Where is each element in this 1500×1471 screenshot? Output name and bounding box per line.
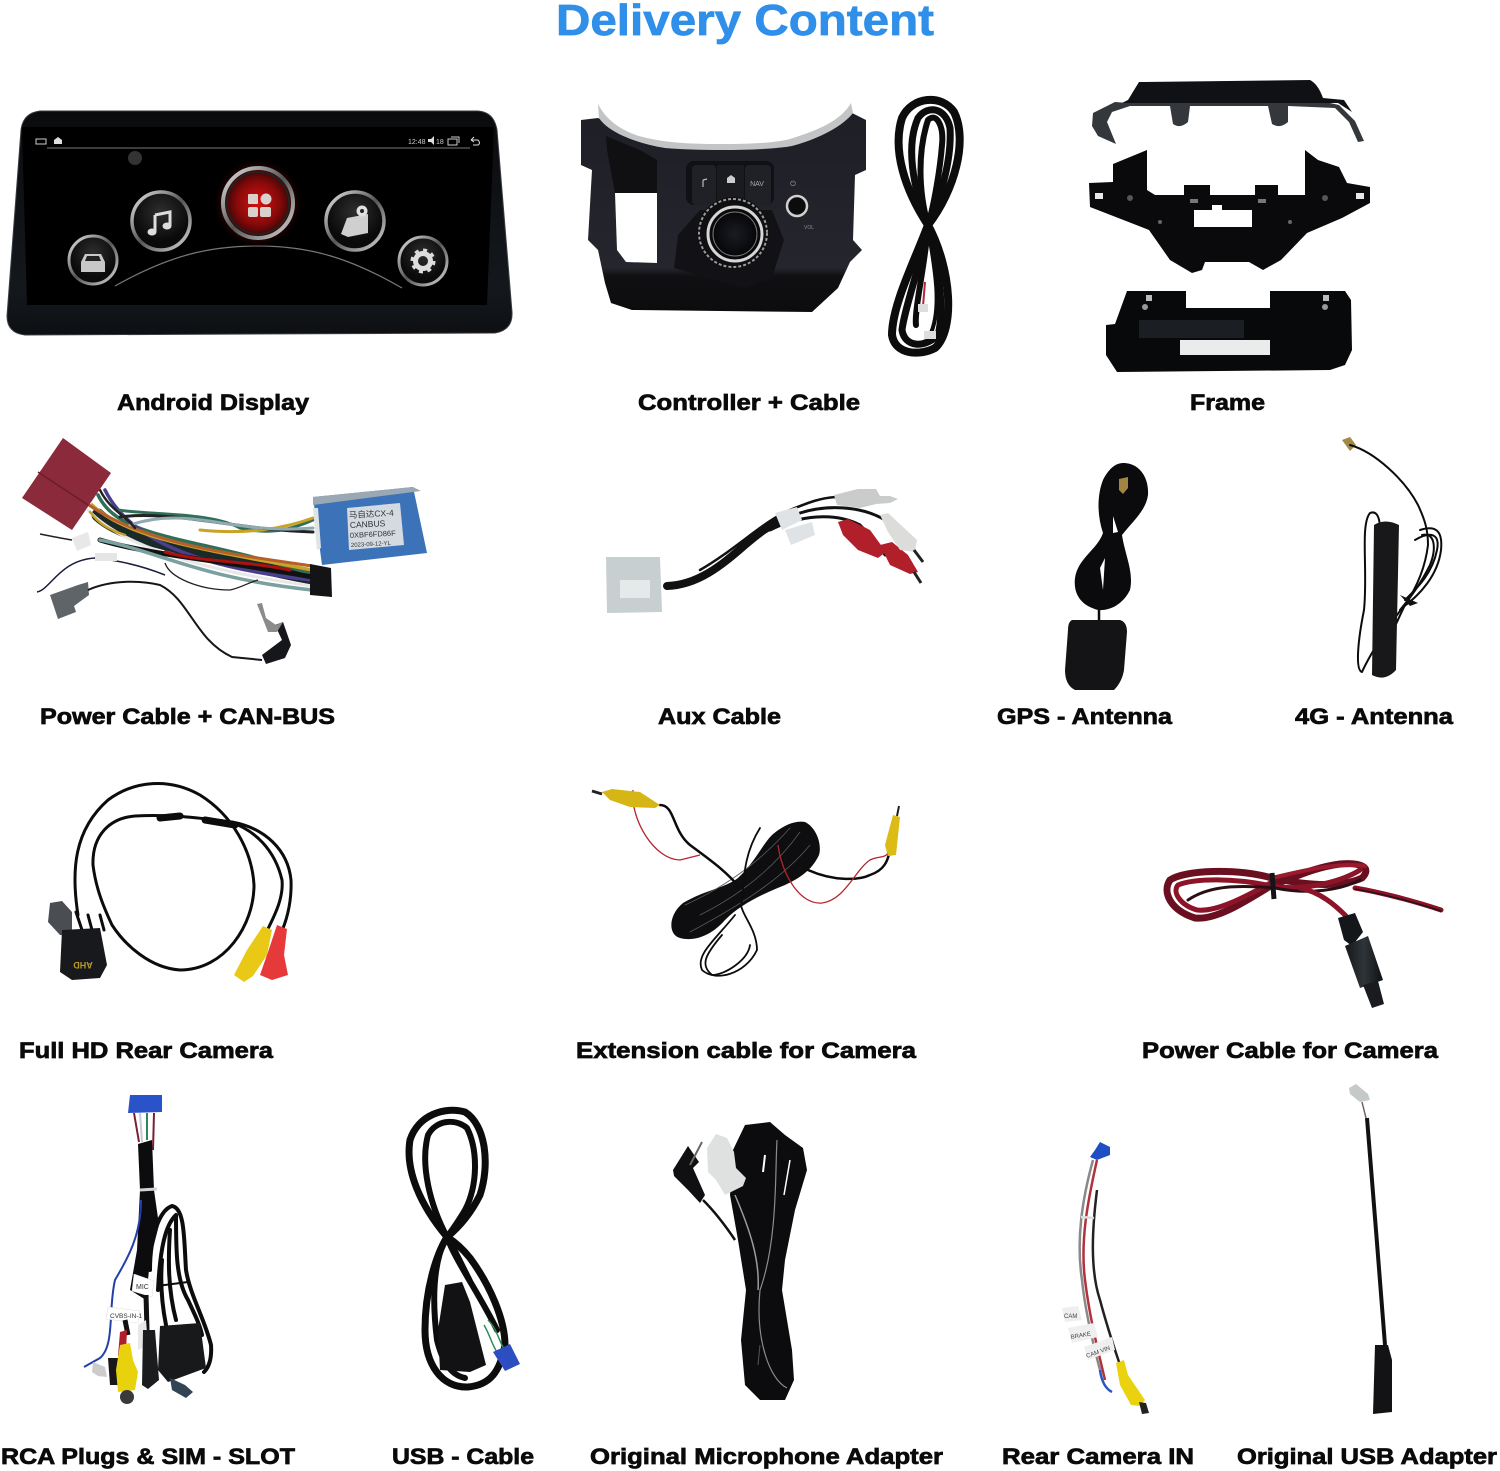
jack lead (703, 1200, 735, 1240)
camera cable inner loop (93, 815, 291, 935)
white connector (1349, 1084, 1370, 1102)
wire tags (106, 1274, 154, 1323)
connector seam (38, 472, 88, 505)
panel: power cable + can-bus (22, 438, 427, 664)
label: controller: Controller + Cable (638, 390, 860, 415)
panel: gps antenna (1065, 463, 1148, 690)
label: extension cable: Extension cable for Camera (576, 1038, 917, 1063)
aux wires (667, 497, 885, 586)
label: camera power cable: Power Cable for Camera (1142, 1038, 1439, 1063)
sim slot box (158, 1323, 206, 1382)
label: 4g antenna: 4G - Antenna (1295, 704, 1454, 729)
4g cable (1350, 445, 1428, 672)
panel: frame (1089, 80, 1370, 372)
wire tags (1062, 1306, 1115, 1360)
can-bus module: CANBUS (350, 518, 386, 530)
yellow rca (1116, 1360, 1145, 1406)
yellow plug left (602, 789, 660, 808)
panel: camera power cable (1167, 864, 1441, 1008)
wire bundle (82, 490, 313, 590)
icon: music (132, 192, 190, 250)
white tag (95, 553, 117, 561)
wire tags (775, 507, 815, 545)
frame middle piece (1089, 150, 1370, 273)
frame holes (1095, 193, 1364, 224)
mic cable bundle (730, 1122, 807, 1400)
connector highlight (620, 580, 650, 598)
wire tags: BRAKE (1070, 1332, 1091, 1341)
can-bus module: 2023-09-12-YL (351, 541, 392, 549)
panel: microphone adapter (673, 1122, 807, 1400)
controller body (581, 112, 866, 312)
frame white panel (1180, 340, 1270, 355)
cut-out (615, 193, 657, 263)
icon: settings gear (399, 237, 447, 285)
usb coloured leads (484, 1320, 505, 1352)
status bar (36, 136, 480, 148)
white plug (92, 1362, 107, 1377)
yellow plug right (885, 815, 900, 856)
panel: 4g antenna (1342, 437, 1441, 678)
red rca plugs (838, 519, 918, 574)
panel: aux cable (606, 489, 923, 613)
camera body (60, 928, 107, 980)
red connector (22, 438, 111, 530)
panel: extension cable (592, 789, 900, 976)
red rca strain relief (118, 1330, 127, 1356)
small white connector (72, 532, 91, 551)
status bar: 18 (436, 139, 444, 146)
black wires (660, 805, 890, 976)
icon: map (326, 192, 384, 250)
extension cable coil (671, 822, 820, 939)
button panel (686, 161, 796, 205)
frame window (1194, 205, 1252, 227)
yellow rca tip (120, 1390, 134, 1404)
red wires (633, 790, 890, 903)
label: gps antenna: GPS - Antenna (997, 704, 1173, 729)
antenna plug (257, 603, 291, 664)
blue tag lead (37, 558, 165, 592)
gold sma connector (1119, 477, 1128, 494)
frame clips (1142, 295, 1329, 310)
label: rear camera: Full HD Rear Camera (19, 1038, 274, 1063)
cable tie (140, 1189, 157, 1190)
white rca top (834, 489, 898, 508)
lead wires (1080, 1160, 1120, 1392)
gps cable coil (1075, 463, 1148, 610)
camera cable big loop (75, 784, 254, 970)
volume knob (787, 196, 807, 216)
cable: controller cable (892, 100, 960, 353)
dc plug (1338, 913, 1384, 1008)
frame bottom piece (1106, 291, 1352, 372)
wire tags: CVBS-IN-1 (110, 1313, 143, 1320)
grey wire (735, 1195, 758, 1290)
right plug tip (897, 806, 899, 816)
white rca sleeve (138, 1320, 148, 1350)
colored leads (134, 1113, 154, 1150)
inner highlights (758, 1140, 790, 1388)
rca tip (1139, 1402, 1149, 1414)
white rca plug (880, 513, 917, 552)
4g connector (1342, 437, 1356, 451)
label: rear camera in: Rear Camera IN (1002, 1444, 1194, 1469)
left recess (606, 136, 657, 193)
usb plug (438, 1282, 486, 1372)
left plug tip (592, 791, 602, 794)
panel: rear camera (48, 784, 291, 982)
usb cable loops (409, 1110, 505, 1387)
can-bus module: 0XBF6FD86F (350, 529, 396, 540)
rotary knob (674, 197, 784, 288)
antenna lead (88, 582, 262, 660)
panel: rear camera in (1062, 1142, 1149, 1414)
label: aux cable: Aux Cable (658, 704, 781, 729)
aux connector (606, 557, 662, 613)
4g antenna body (1372, 522, 1399, 678)
jack plug (673, 1142, 705, 1203)
grey connector (50, 582, 89, 619)
display bezel (7, 111, 512, 335)
camera bracket (48, 901, 72, 936)
red rca (260, 925, 288, 980)
label: usb cable: USB - Cable (392, 1444, 534, 1469)
panel: controller: VOL (804, 225, 814, 231)
frame top piece (1092, 80, 1364, 144)
white connector (707, 1134, 746, 1195)
can-bus module (313, 487, 427, 565)
blue connector (493, 1344, 520, 1371)
gps puck (1065, 620, 1127, 690)
dark plug (108, 1358, 122, 1385)
panel: usb adapter (1349, 1084, 1392, 1414)
label: frame: Frame (1190, 390, 1265, 415)
button panel: ⏻ (790, 180, 796, 188)
blue connector (128, 1095, 162, 1113)
leads (1362, 1102, 1366, 1118)
usb socket (1373, 1345, 1392, 1414)
cable (1367, 1118, 1385, 1345)
glossy strip (1139, 320, 1244, 338)
panel: controller (581, 103, 866, 312)
icon: car (69, 236, 117, 284)
rca pins (914, 550, 923, 583)
cable tie (1081, 1217, 1094, 1218)
red loops (1167, 864, 1441, 918)
dock arc (115, 246, 402, 288)
green plug (170, 1378, 193, 1398)
blue connector (1090, 1142, 1110, 1160)
main wire loom (130, 1140, 159, 1300)
label: power cable + can-bus: Power Cable + CAN-BUS (40, 704, 335, 729)
camera marking: AHD (73, 960, 93, 970)
label: microphone adapter: Original Microphone Adapter (590, 1444, 943, 1469)
short leads (125, 1295, 147, 1335)
black jack (142, 1330, 159, 1389)
panel: android display (7, 111, 512, 335)
cable tie (1272, 873, 1274, 899)
status bar: 12:48 (408, 139, 426, 146)
4g cable loops (1358, 512, 1441, 672)
label: rca plugs: RCA Plugs & SIM - SLOT (1, 1444, 296, 1469)
label: usb adapter: Original USB Adapter (1237, 1444, 1498, 1469)
wire tags: CAM VIN (1086, 1346, 1111, 1360)
gps stem (1098, 610, 1100, 622)
lead branch (165, 563, 258, 590)
wire tags: MIC (136, 1284, 149, 1291)
button panel: NAV (750, 181, 764, 188)
silver trim (598, 103, 853, 150)
icon: apps (212, 157, 304, 249)
cable tie (1400, 595, 1418, 606)
sim lead loop (150, 1206, 211, 1372)
camera mount leads (76, 912, 104, 930)
dot (128, 151, 142, 165)
panel: usb cable (409, 1110, 520, 1387)
black connector (310, 564, 332, 597)
display screen (22, 127, 494, 305)
yellow rca (234, 926, 272, 982)
coil highlights (685, 828, 810, 932)
small black lead (40, 534, 72, 540)
blue wires (84, 1200, 141, 1367)
label: android display: Android Display (117, 390, 310, 415)
cable tie lower (157, 1282, 188, 1286)
can-bus module: 马自达CX-4 (349, 508, 394, 520)
panel: rca plugs & sim slot (84, 1095, 211, 1404)
wire tags: CAM (1064, 1314, 1077, 1320)
yellow rca (116, 1343, 138, 1392)
